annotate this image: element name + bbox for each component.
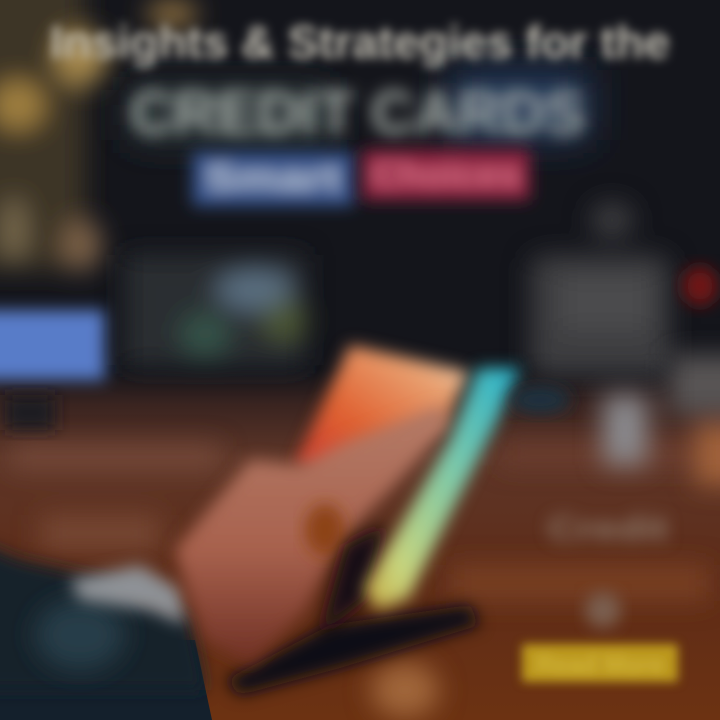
- badge: red: [362, 150, 530, 200]
- red light: [682, 266, 718, 306]
- title line 2: CREDIT CARDS: [130, 79, 585, 148]
- caption on table: Credit: [548, 510, 668, 548]
- card body: [295, 345, 470, 480]
- title backdrop glow: [130, 70, 590, 140]
- rainbow card edge: [364, 368, 520, 610]
- wooden table: [0, 370, 720, 720]
- left blue panel: [0, 310, 105, 380]
- sleeve: [0, 535, 205, 690]
- dark patch under left panel: [5, 395, 55, 430]
- grey bottle / figure: [530, 202, 670, 375]
- yellow button: [522, 644, 678, 682]
- blurred middle scene: [125, 255, 307, 365]
- palm and fingers: [175, 405, 450, 665]
- title line 1: Insights & Strategies for the: [50, 16, 670, 68]
- badge: blue: [192, 152, 354, 206]
- title block: [50, 16, 670, 206]
- small icon above button: [585, 592, 621, 628]
- warm background lights: [0, 0, 198, 271]
- orange reflection on hand: [305, 504, 345, 556]
- hand holding card: [0, 345, 570, 720]
- sleeve highlight: [35, 600, 125, 670]
- dark gap between fingers: [320, 525, 385, 635]
- badge: red: Choices: [372, 156, 520, 194]
- yellow button: Read More: [536, 649, 664, 679]
- card shadow: [510, 386, 570, 414]
- sleeve base: [0, 640, 212, 720]
- badge: blue: Smart: [205, 157, 340, 198]
- table grain and reflections: [10, 440, 710, 718]
- glasses on the right: [603, 355, 720, 485]
- phone / dark object on table: [225, 605, 480, 695]
- shirt cuff: [70, 565, 185, 625]
